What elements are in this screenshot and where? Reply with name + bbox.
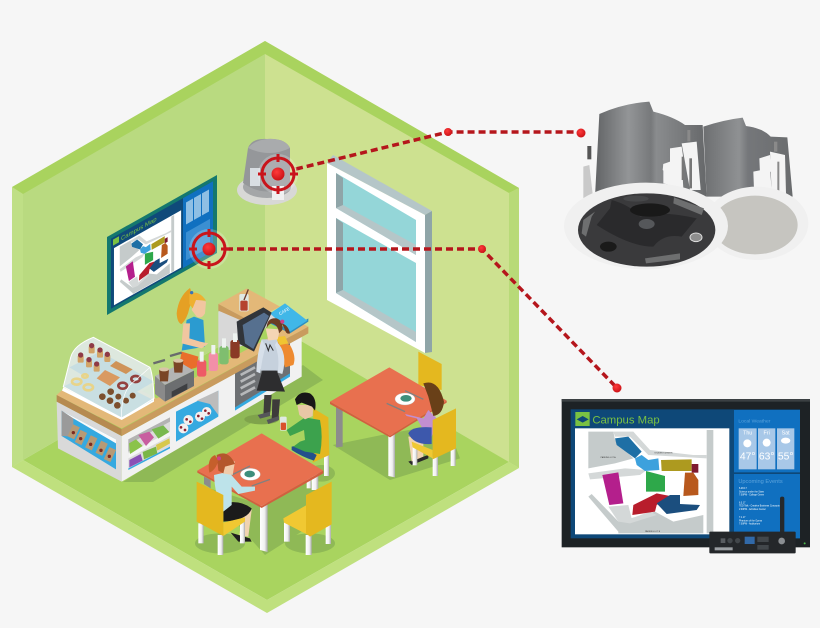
upcoming events panel: Phantom of the Opera: [739, 519, 763, 522]
boy chair: [307, 408, 329, 488]
back wall left: [12, 41, 265, 467]
counter right face: [122, 337, 302, 482]
left chair: [197, 482, 245, 555]
wall top rim: [12, 41, 519, 194]
book: [270, 303, 308, 333]
local weather panel: Local Weather: [738, 418, 771, 424]
left seated girl: [209, 453, 255, 542]
campus map: PARKING LOT A: [601, 456, 616, 459]
barista: [177, 288, 208, 371]
standing girl with backpack: [244, 318, 294, 424]
raised shelf: [218, 288, 280, 353]
coffee machine: [153, 353, 194, 402]
upcoming events panel: Science under the Stars: [739, 490, 765, 493]
floor front edge: [12, 460, 519, 613]
campus map: PARKING LOT B: [645, 530, 661, 533]
small ceiling speaker: [237, 139, 297, 205]
floor shadow under counter: [123, 365, 323, 482]
right chair: [412, 408, 456, 476]
rear speaker: [703, 118, 808, 260]
local weather panel: 47°: [740, 451, 755, 462]
wall screen: Campus Map: [121, 216, 157, 242]
local weather panel: [738, 418, 794, 469]
local weather panel: 55°: [778, 451, 793, 462]
upcoming events panel: [738, 479, 783, 526]
upcoming events panel: 7:00PM - Auditorium: [739, 523, 760, 526]
callout dots: [444, 128, 622, 392]
upcoming events panel: 6.3.17: [739, 502, 746, 504]
bottom chair: [283, 482, 332, 555]
digital display with campus map: [562, 399, 810, 553]
screen header: Campus Map: [592, 414, 660, 426]
left shelf niche: [62, 411, 116, 469]
target: wall screen: [189, 229, 229, 269]
media player box: [709, 497, 796, 553]
pastries: [78, 346, 110, 372]
callout lines: [226, 132, 617, 388]
room: isometric cutaway: [12, 41, 519, 613]
screen header: [575, 412, 660, 426]
local weather panel: 63°: [759, 451, 774, 462]
left table: [197, 433, 323, 552]
shadow: left table: [204, 480, 330, 555]
upcoming events panel: 6.28.17: [739, 488, 747, 490]
wall right end cap: [509, 188, 519, 468]
cup: [239, 294, 249, 311]
upcoming events panel: 7.1.17: [739, 517, 746, 519]
right table back chair: [418, 352, 442, 390]
local weather panel: Fri: [764, 431, 770, 437]
local weather panel: Sat: [782, 431, 790, 437]
counter wood top: [57, 322, 308, 428]
back cabinet panel: [235, 340, 290, 411]
local weather panel: Thu: [743, 431, 752, 437]
upcoming events panel: TED Talk - Creative Business Concepts: [739, 505, 781, 508]
POS monitor: [237, 307, 272, 352]
floor: [23, 320, 509, 600]
counter and barista scene: [57, 288, 308, 482]
front speaker: [564, 102, 728, 269]
bottles: [197, 333, 240, 377]
counter left face: [57, 402, 122, 482]
mini campus map: [114, 210, 181, 305]
upcoming events panel: Upcoming Events: [738, 479, 783, 485]
wall left end cap: [12, 187, 23, 467]
tables and seated people: [195, 352, 460, 555]
window: [327, 155, 432, 353]
seated boy: [280, 392, 322, 461]
book: CAFE: [278, 306, 291, 316]
right table: [330, 367, 447, 477]
wall screen: [107, 175, 217, 315]
right seated girl: [405, 382, 444, 465]
display case: [62, 337, 154, 420]
shadow: right table: [333, 423, 460, 480]
middle shelf niche with boxes: [128, 417, 170, 470]
campus map: STUDENT CENTER: [654, 452, 673, 454]
campus map: [575, 428, 729, 534]
upcoming events panel: 2:00PM - Activities Center: [739, 508, 766, 511]
back wall right: [265, 41, 519, 468]
jar shelf niche: [176, 391, 218, 442]
large speakers photo: [564, 102, 808, 269]
upcoming events panel: 7:00PM - College Green: [739, 494, 765, 497]
target: ceiling speaker: [258, 154, 298, 194]
